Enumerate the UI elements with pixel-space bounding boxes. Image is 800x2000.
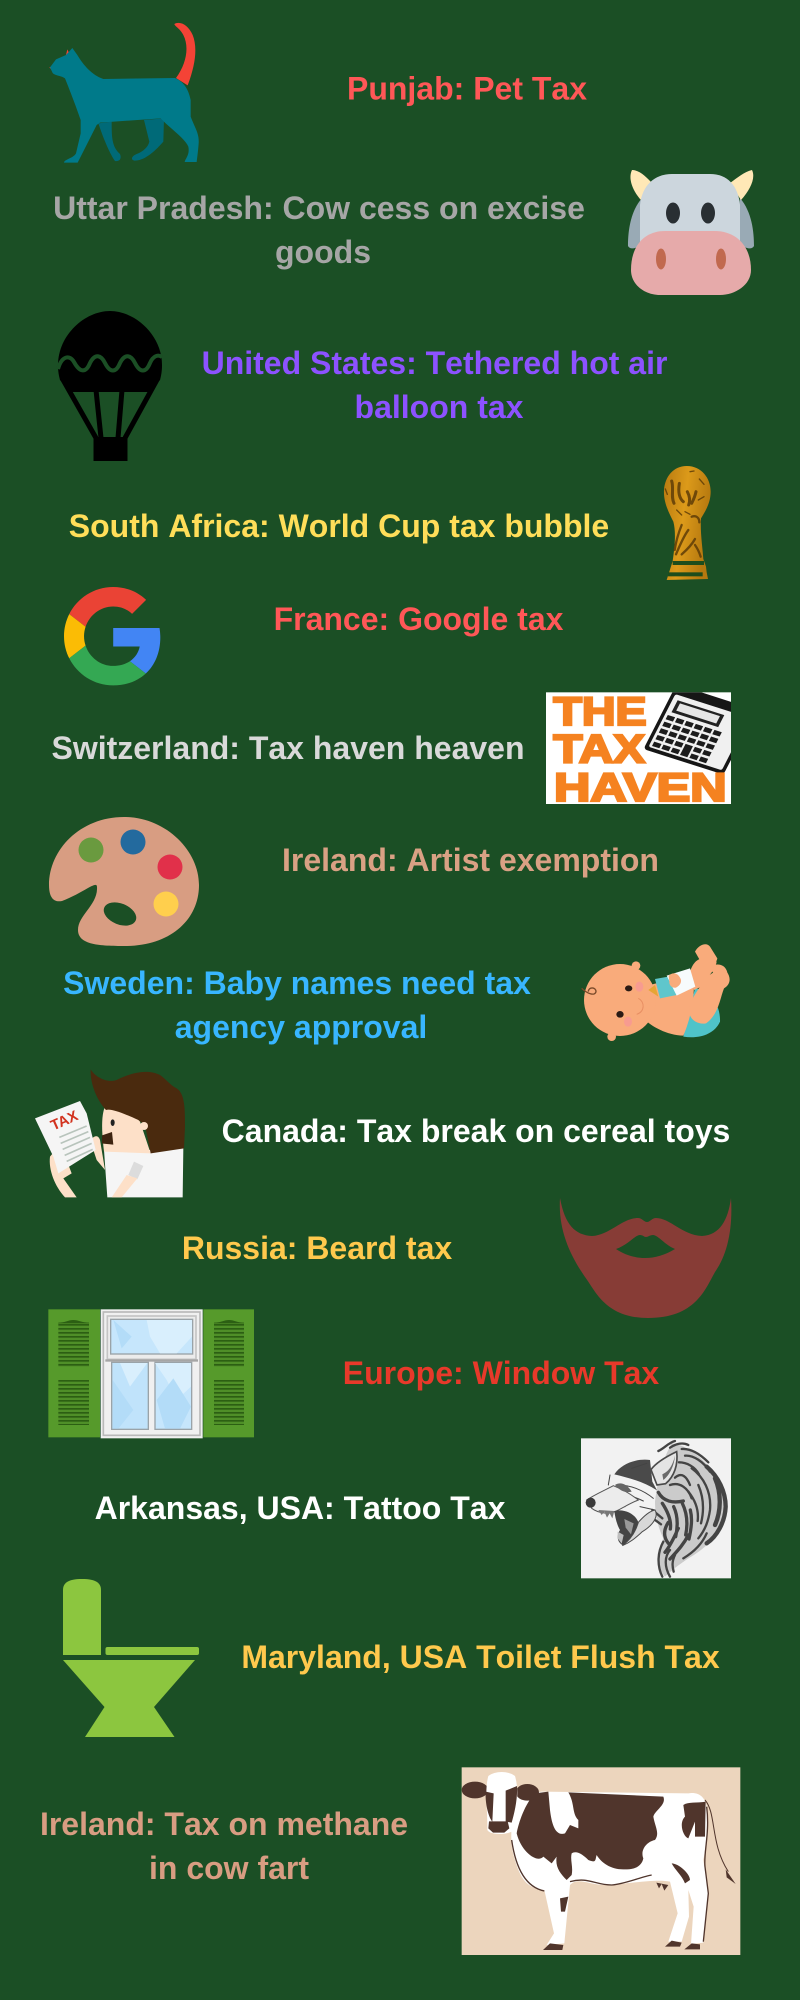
icon: the tax haven logo	[546, 692, 731, 804]
text: Sweden	[63, 965, 531, 1045]
text: United States	[202, 345, 667, 425]
text: Ireland methane: in cow fart	[149, 1850, 309, 1886]
icon: wolf tattoo	[581, 1438, 731, 1578]
heading: Maryland: Maryland, USA Toilet Flush Tax	[241, 1639, 720, 1675]
text: Arkansas: Arkansas, USA: Tattoo Tax	[95, 1490, 506, 1526]
heading: Ireland artist: Ireland: Artist exemption	[282, 842, 659, 878]
heading: Europe: Europe: Window Tax	[343, 1355, 659, 1391]
icon: toilet	[63, 1579, 199, 1737]
heading: Punjab: Punjab: Pet Tax	[347, 70, 587, 106]
text: Uttar Pradesh	[53, 190, 585, 270]
text: Switzerland: Switzerland: Tax haven heaven	[51, 730, 525, 766]
icon: dairy cow	[462, 1767, 740, 1955]
text: United States: United States: Tethered hot air	[202, 345, 667, 381]
text: Ireland methane	[40, 1806, 408, 1886]
text: Russia: Russia: Beard tax	[182, 1230, 452, 1266]
icon: baby with bottle	[582, 944, 730, 1041]
icon: window with shutters	[48, 1309, 254, 1438]
heading: France: France: Google tax	[274, 601, 564, 637]
icon: the tax haven logo: TAX	[553, 728, 645, 772]
icon: beard	[560, 1198, 731, 1318]
icon: the tax haven logo: HAVEN	[554, 766, 727, 810]
text: Sweden: Sweden: Baby names need tax	[63, 965, 531, 1001]
icon: cow face	[628, 170, 754, 295]
icon: hot air balloon	[58, 311, 162, 461]
icon: man reading tax paper	[35, 1069, 185, 1197]
icon: cat	[49, 23, 199, 163]
heading: Canada: Canada: Tax break on cereal toys	[222, 1113, 730, 1149]
icon: man reading tax paper: TAX	[48, 1108, 81, 1134]
text: Uttar Pradesh: Uttar Pradesh: Cow cess on excise	[53, 190, 585, 226]
icon: the tax haven logo: THE	[553, 690, 647, 734]
icon: world cup trophy	[664, 466, 711, 580]
text: United States: balloon tax	[355, 389, 524, 425]
text: Ireland methane: Ireland: Tax on methane	[40, 1806, 408, 1842]
text: Sweden: agency approval	[175, 1009, 427, 1045]
text: South Africa: South Africa: World Cup tax bubble	[69, 508, 609, 544]
text: Uttar Pradesh: goods	[275, 234, 371, 270]
icon: paint palette	[49, 817, 199, 946]
icon: Google G	[64, 587, 160, 685]
